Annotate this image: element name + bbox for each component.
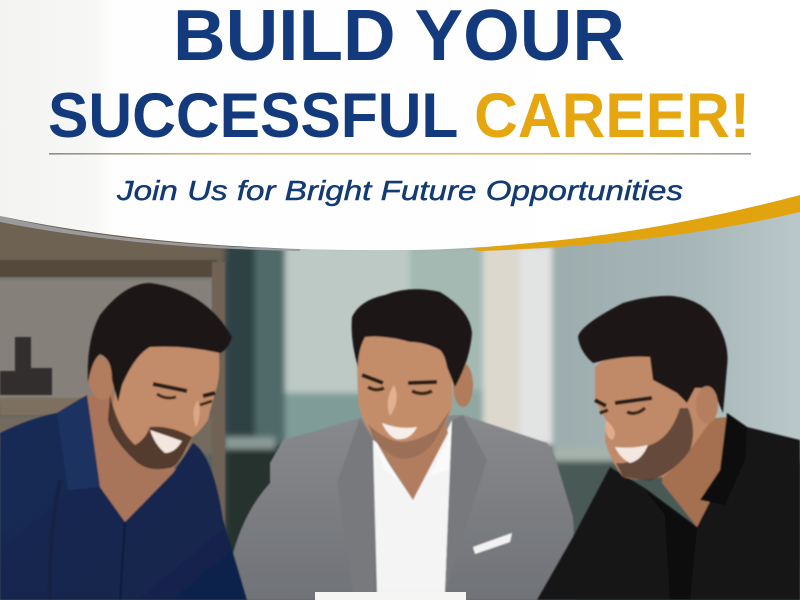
grey edge shadow xyxy=(0,216,300,251)
paper on table xyxy=(315,592,466,600)
title line 2: SUCCESSFUL CAREER! xyxy=(48,81,750,151)
divider line xyxy=(49,153,751,155)
icon: shelf ornament xyxy=(0,337,52,395)
gold swoosh xyxy=(470,195,800,251)
person: left, navy shirt xyxy=(0,283,248,600)
office background xyxy=(0,205,800,600)
person: center, grey suit xyxy=(233,289,578,600)
subtitle: Join Us for Bright Future Opportunities xyxy=(116,175,683,206)
header panel xyxy=(0,0,800,250)
person: right, black shirt xyxy=(537,296,800,600)
